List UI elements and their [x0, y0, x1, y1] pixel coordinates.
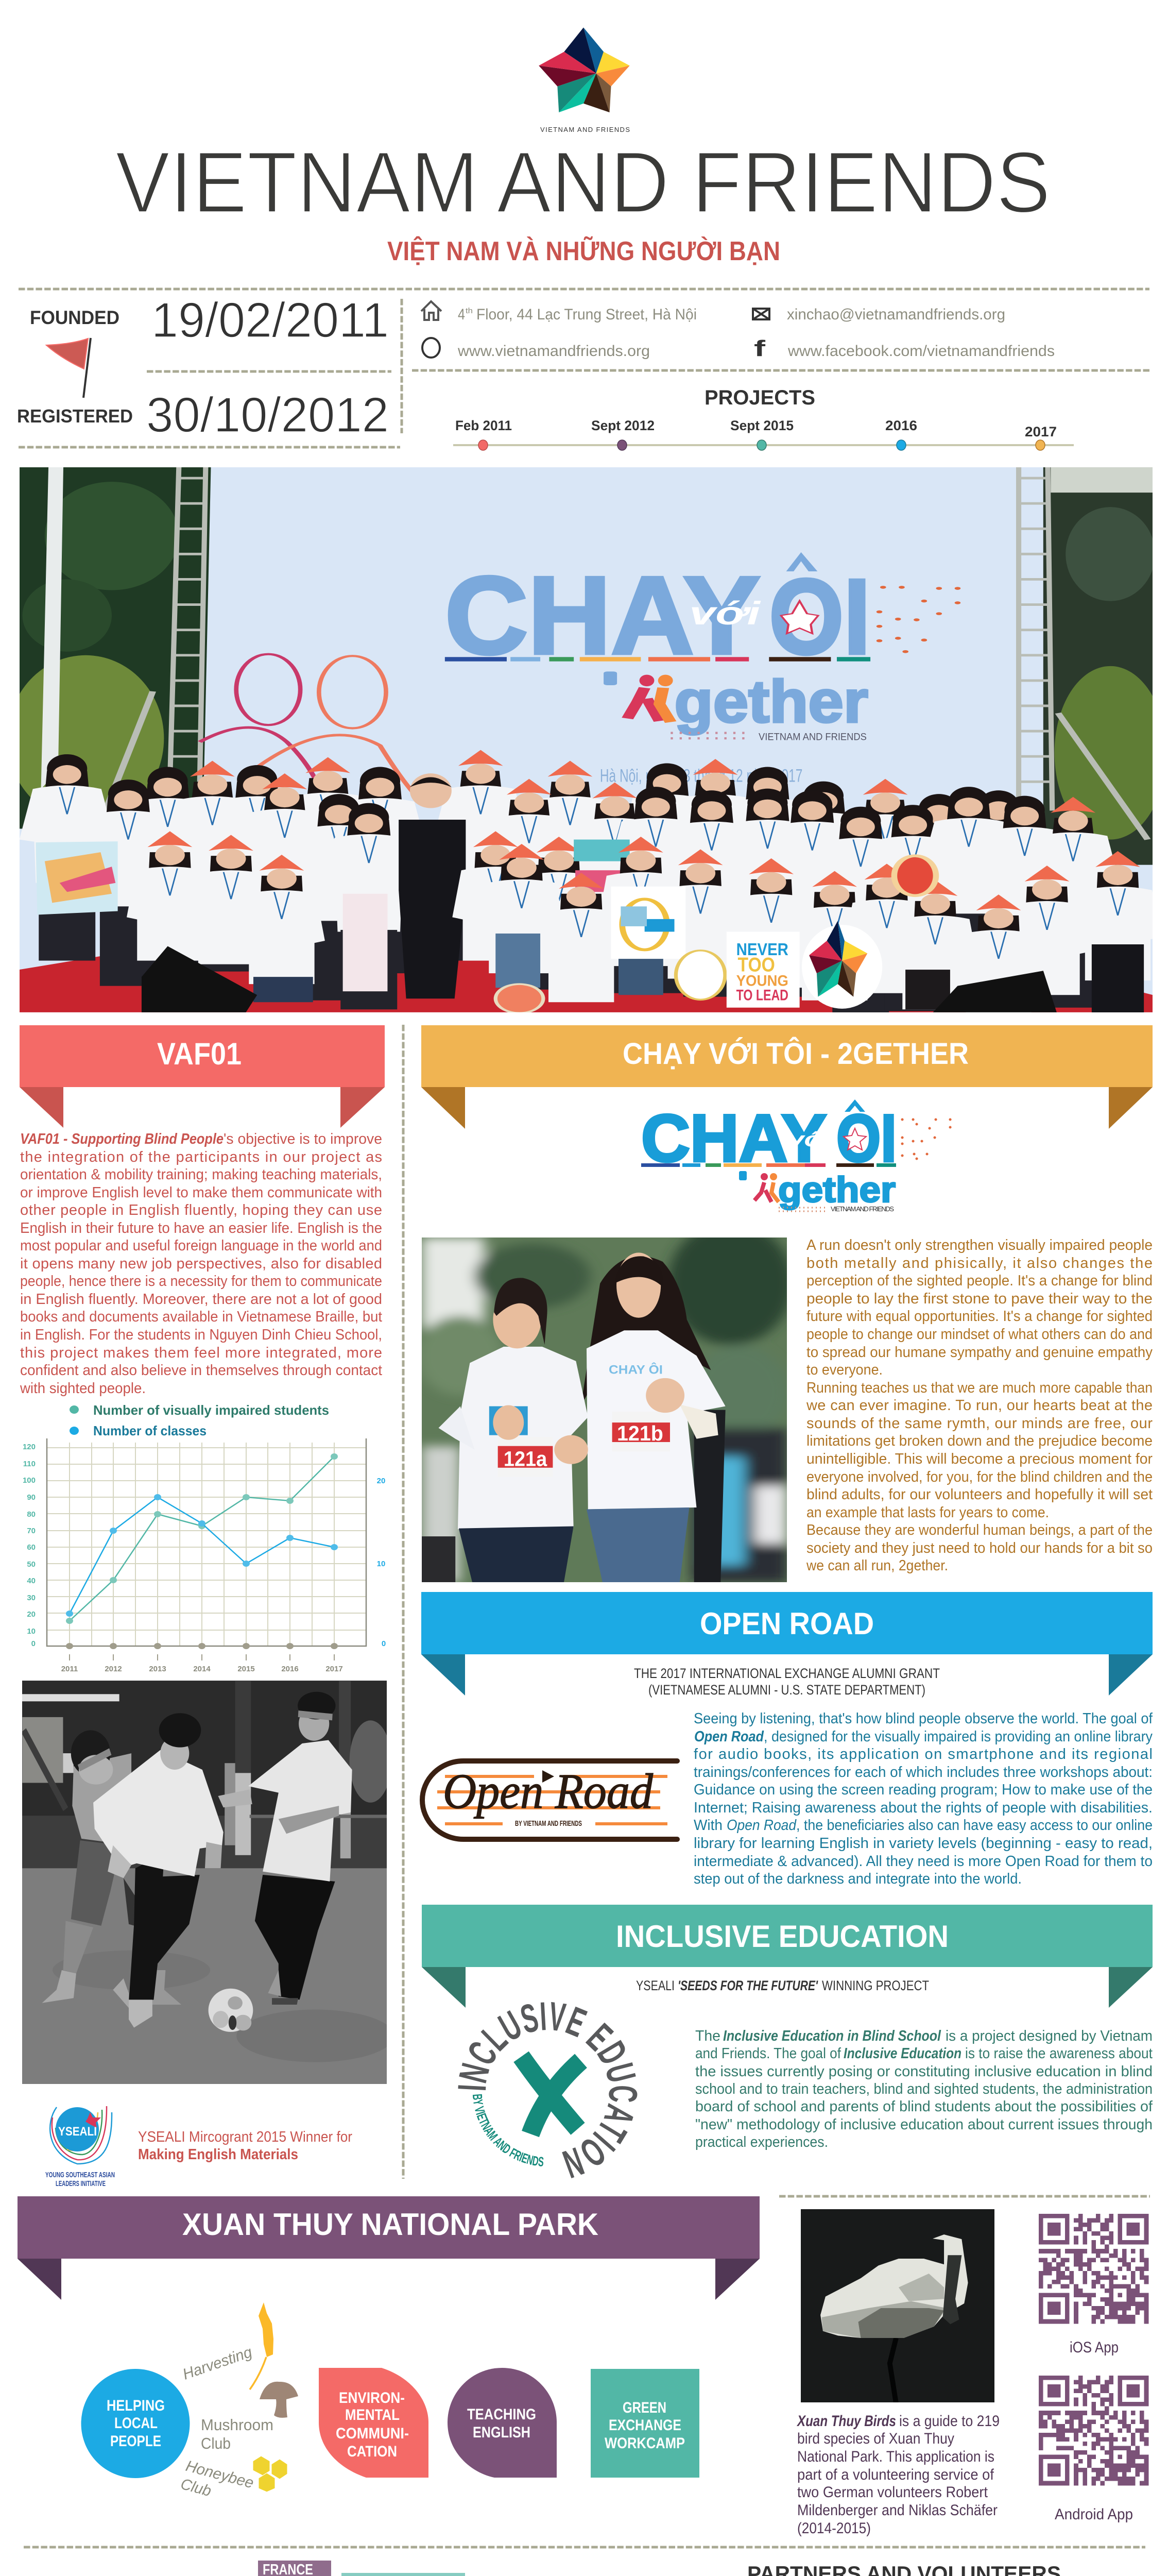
Chay voi toi description text: limitations get broken down and the prejudice become	[806, 1433, 1153, 1449]
heading ribbon: Inclusive Education: INCLUSIVE EDUCATION	[616, 1919, 949, 1954]
logo: Open Road: BY VIETNAM AND FRIENDS	[515, 1819, 582, 1828]
VAF01 description text: other people in English fluently, hoping they can use	[20, 1202, 382, 1218]
heading ribbon: Chay voi toi	[421, 1025, 1153, 1129]
chart legend	[70, 1402, 329, 1438]
Inclusive Education description text: the issues currently posing or constituting inclusive education in blind	[695, 2063, 1153, 2080]
founded block: FOUNDED	[30, 307, 119, 328]
Open Road description text: Internet; Raising awareness about the rights of people with disabilities.	[694, 1800, 1153, 1816]
projects timeline: 2016	[885, 418, 917, 433]
Inclusive Education subtitle: 'SEEDS FOR THE FUTURE'	[678, 1978, 818, 1993]
logo: Inclusive Education: BY VIETNAM AND FRIENDS	[473, 2094, 544, 2166]
Chay voi toi description text: sounds of the same rymth, our minds are free, our	[806, 1415, 1153, 1432]
Open Road description text	[694, 1710, 1153, 1887]
panel: partners map	[17, 2561, 627, 2576]
circle: helping local people: PEOPLE	[110, 2433, 161, 2450]
email: xinchao@vietnamandfriends.org	[787, 306, 1005, 323]
VAF01 description text: this project makes them feel more integrated, more	[20, 1345, 382, 1361]
line chart: students and classes 2011-2017: 2013	[149, 1665, 166, 1673]
hero photo: group on stage in front of banner	[7, 467, 1166, 1024]
panel: Xuan Thuy Birds app	[796, 2209, 1148, 2537]
bird app description: two German volunteers Robert	[797, 2484, 988, 2501]
Inclusive Education description text: The	[695, 2028, 720, 2044]
Chay voi toi description text	[806, 1237, 1153, 1574]
Open Road description text: Open Road	[694, 1728, 764, 1745]
Chay voi toi description text: unintelligible. This will become a precious moment for	[806, 1451, 1153, 1467]
photo: blindfolded students playing football	[22, 1681, 394, 2084]
Chay voi toi description text: people to lay the first stone to pave their way to the	[806, 1291, 1153, 1307]
bird app description: is a guide to 219	[899, 2413, 1000, 2430]
projects timeline	[453, 418, 1074, 450]
bird app description: (2014-2015)	[797, 2520, 871, 2537]
logo: Open Road	[422, 1761, 677, 1839]
Chay voi toi description text: A run doesn't only strengthen visually impaired people	[806, 1237, 1153, 1253]
logo: Chay voi toi 2gether: OI	[836, 1100, 897, 1176]
VAF01 description text: English in their future to have an easier life. English is the	[20, 1220, 382, 1236]
chart legend: Number of classes	[93, 1423, 207, 1438]
Inclusive Education description text: and Friends. The goal of	[695, 2045, 841, 2062]
label: Android app: Android App	[1055, 2506, 1133, 2523]
Inclusive Education description text: Inclusive Education in Blind School	[723, 2028, 941, 2044]
QR code: Android app	[1039, 2378, 1148, 2483]
line chart: students and classes 2011-2017: 10	[27, 1627, 36, 1636]
logo: Chay voi toi 2gether: gether	[778, 1170, 896, 1210]
contact block	[421, 301, 1055, 361]
line chart: students and classes 2011-2017: 20	[27, 1610, 36, 1619]
Inclusive Education subtitle	[636, 1978, 929, 1993]
VAF01 description text	[20, 1131, 382, 1397]
logo: colourful star	[539, 27, 630, 133]
projects heading: PROJECTS	[705, 386, 815, 409]
icon: honeycomb	[253, 2456, 287, 2492]
Inclusive Education description text	[695, 2028, 1153, 2150]
shape: green exchange workcamp: EXCHANGE	[609, 2417, 681, 2434]
logo: YSEALI: YOUNG SOUTHEAST ASIAN	[45, 2171, 115, 2179]
hero photo: group on stage in front of banner: VIETNAM AND FRIENDS	[759, 731, 867, 742]
VAF01 description text: or improve English level to make them communicate with	[20, 1184, 382, 1201]
VAF01 description text: it opens many new job perspectives, also for disabled	[20, 1256, 382, 1272]
facebook url: www.facebook.com/vietnamandfriends	[787, 343, 1055, 360]
Chay voi toi description text: we can all run, 2gether.	[806, 1557, 948, 1574]
line chart: students and classes 2011-2017: 2016	[281, 1665, 299, 1673]
heading ribbon: Open Road: OPEN ROAD	[700, 1606, 874, 1641]
label: mushroom club: Mushroom	[201, 2416, 273, 2434]
VAF01 description text: confident and also believe in themselves through contact	[20, 1362, 382, 1379]
Chay voi toi description text: society and they just need to hold our hands for a bit so	[806, 1540, 1153, 1556]
line chart: students and classes 2011-2017: 90	[27, 1493, 36, 1502]
VAF01 description text: in English fluently. Moreover, there are not a lot of good	[20, 1291, 382, 1308]
VAF01 description text: people, hence there is a necessity for them to communicate	[20, 1273, 382, 1290]
registered block: 30/10/2012	[146, 387, 389, 443]
shape: teaching english: ENGLISH	[473, 2424, 530, 2441]
hero photo: group on stage in front of banner: TOO	[738, 954, 775, 976]
logo: Chay voi toi 2gether: VIETNAM AND FRIENDS	[831, 1205, 894, 1213]
shape: green exchange workcamp: GREEN	[623, 2399, 666, 2416]
title: VIETNAM AND FRIENDS	[115, 133, 1051, 231]
Open Road description text: With	[694, 1817, 723, 1834]
registered block: REGISTERED	[17, 405, 133, 427]
hero photo: group on stage in front of banner: với	[689, 595, 761, 632]
line chart: students and classes 2011-2017: 2012	[105, 1665, 122, 1673]
Inclusive Education description text: Inclusive Education	[844, 2045, 961, 2062]
registered block	[17, 387, 389, 443]
Open Road grant subtitle: THE 2017 INTERNATIONAL EXCHANGE ALUMNI GRANT	[634, 1666, 940, 1681]
heading ribbon: Xuan Thuy National Park	[18, 2196, 760, 2300]
VAF01 description text: with sighted people.	[20, 1380, 146, 1397]
line chart: students and classes 2011-2017: 100	[23, 1476, 36, 1485]
heading ribbon: Chay voi toi: CHẠY VỚI TÔI - 2GETHER	[623, 1037, 969, 1071]
line chart: students and classes 2011-2017: 70	[27, 1527, 36, 1535]
subtitle: VIỆT NAM VÀ NHỮNG NGƯỜI BẠN	[387, 236, 780, 266]
panel: VAF01	[20, 1025, 394, 2188]
Chay voi toi description text: to everyone.	[806, 1362, 883, 1378]
projects timeline: 2017	[1025, 424, 1057, 439]
photo: two runners: CHAY ÔI	[609, 1362, 663, 1377]
Chay voi toi description text: everyone involved, for you, for the blind children and the	[806, 1469, 1153, 1485]
Inclusive Education description text: is to raise the awareness about	[965, 2045, 1153, 2062]
line chart: students and classes 2011-2017: 40	[27, 1577, 36, 1585]
Chay voi toi description text: blind adults, for our volunteers and hopefully it will set	[806, 1486, 1153, 1503]
heading ribbon: Open Road	[421, 1592, 1153, 1696]
Open Road description text: trainings/conferences for each of which includes three workshops about:	[694, 1764, 1153, 1781]
Inclusive Education description text: practical experiences.	[695, 2134, 828, 2150]
label: mushroom club	[201, 2416, 273, 2452]
shape: environmental communication: COMMUNI-	[336, 2425, 409, 2442]
VAF01 description text: books and documents available in Vietnamese Braille, but	[20, 1309, 382, 1325]
line chart: students and classes 2011-2017: 2015	[237, 1665, 255, 1673]
VAF01 description text: in English. For the students in Nguyen Dinh Chieu School,	[20, 1327, 382, 1343]
icon: red flag	[46, 338, 91, 398]
hero photo: group on stage in front of banner: OI	[769, 557, 870, 676]
logo: Chay voi toi 2gether: với	[788, 1128, 832, 1151]
logo: Chay voi toi 2gether: CHAY	[641, 1100, 827, 1176]
panel: Xuan Thuy National Park	[18, 2196, 760, 2500]
YSEALI award caption: Making English Materials	[138, 2146, 298, 2163]
Chay voi toi description text: to spread our humane sympathy and genuine empathy	[806, 1344, 1153, 1361]
Chay voi toi description text: perception of the sighted people. It's a change for blind	[806, 1273, 1153, 1289]
projects timeline: Sept 2015	[730, 418, 794, 433]
shape: teaching english: TEACHING	[467, 2406, 536, 2423]
heading ribbon: VAF01: VAF01	[157, 1037, 242, 1071]
Open Road description text: step out of the darkness and integrate into the world.	[694, 1871, 1022, 1887]
circle: helping local people: HELPING	[107, 2397, 165, 2414]
line chart: students and classes 2011-2017: 110	[23, 1460, 36, 1468]
logo: Open Road: Open Road	[443, 1764, 654, 1819]
line chart: students and classes 2011-2017: 30	[27, 1594, 36, 1602]
label: honeybee club: Honeybee	[184, 2458, 255, 2492]
VAF01 description text: VAF01 - Supporting Blind People	[20, 1131, 224, 1147]
logo: YSEALI	[45, 2106, 115, 2188]
photo: two runners: 121b	[617, 1422, 663, 1446]
shape: environmental communication	[319, 2368, 428, 2478]
bird app description	[796, 2413, 1000, 2537]
line chart: students and classes 2011-2017	[23, 1438, 386, 1673]
Open Road grant subtitle: (VIETNAMESE ALUMNI - U.S. STATE DEPARTMENT)	[648, 1682, 925, 1698]
icon: wheat	[250, 2302, 273, 2389]
YSEALI award caption: YSEALI Mircogrant 2015 Winner for	[138, 2129, 352, 2145]
bird app description: bird species of Xuan Thuy	[797, 2430, 954, 2447]
panel: Chay voi toi - 2gether	[417, 1025, 1153, 1582]
Chay voi toi description text: Because they are wonderful human beings, a part of the	[806, 1522, 1153, 1538]
heading ribbon: Inclusive Education	[422, 1905, 1153, 2008]
Inclusive Education subtitle: WINNING PROJECT	[822, 1978, 929, 1993]
Inclusive Education subtitle: YSEALI	[636, 1978, 675, 1993]
QR code: iOS app	[1039, 2216, 1148, 2321]
logo: Chay voi toi 2gether	[641, 1099, 950, 1213]
photo: two runners: 121a	[504, 1448, 547, 1471]
icon: facebook: f	[754, 336, 766, 361]
label: honeybee club: Club	[179, 2476, 213, 2500]
line chart: students and classes 2011-2017: 80	[27, 1510, 36, 1519]
Open Road description text: Guidance on using the screen reading program; How to make use of the	[694, 1782, 1153, 1798]
founded block: 19/02/2011	[151, 293, 389, 348]
Chay voi toi description text: we can ever imagine. To run, our hearts beat at the	[806, 1397, 1153, 1414]
hero photo: group on stage in front of banner: YOUNG	[736, 973, 788, 989]
hero photo: group on stage in front of banner: gether	[675, 668, 868, 735]
VAF01 description text: most popular and useful foreign language in the world and	[20, 1238, 382, 1254]
Open Road description text: library for learning English in variety levels (beginning - easy to read,	[694, 1835, 1153, 1852]
label: harvesting: Harvesting	[181, 2344, 254, 2383]
bird app description: National Park. This application is	[797, 2448, 994, 2465]
Open Road description text: intermediate & advanced). All they need is more Open Road for them to	[694, 1853, 1153, 1870]
image: spoonbill	[801, 2209, 994, 2403]
panel: Open Road	[421, 1592, 1153, 1887]
address: Floor, 44 Lạc Trung Street, Hà Nội	[476, 306, 697, 323]
shape: green exchange workcamp: WORKCAMP	[605, 2435, 685, 2452]
icon: house	[421, 301, 441, 320]
callout: Germany partners	[341, 2573, 465, 2576]
projects timeline: Feb 2011	[455, 418, 512, 433]
logo: Inclusive Education: INCLUSIVE EDUCATION	[458, 2002, 638, 2178]
Chay voi toi description text: both metally and phisically, it also changes the	[806, 1255, 1153, 1272]
Inclusive Education description text: "new" methodology of inclusive education about current issues through	[695, 2116, 1153, 2133]
hero photo: group on stage in front of banner: TO LEAD	[736, 987, 788, 1004]
founded block	[30, 293, 389, 348]
VAF01 description text: the integration of the participants in our project as	[20, 1149, 382, 1165]
circle: helping local people: LOCAL	[114, 2415, 158, 2432]
icon: globe	[422, 338, 440, 358]
line chart: students and classes 2011-2017: 2014	[193, 1665, 211, 1673]
heading ribbon: VAF01	[20, 1025, 385, 1128]
icon: mushroom	[260, 2382, 298, 2418]
line chart: students and classes 2011-2017: 0	[31, 1639, 36, 1648]
hero photo: group on stage in front of banner: CHAY	[445, 554, 760, 677]
website: www.vietnamandfriends.org	[457, 343, 650, 360]
shape: environmental communication: CATION	[347, 2443, 397, 2460]
Open Road grant subtitle	[634, 1666, 940, 1698]
logo: YSEALI: LEADERS INITIATIVE	[56, 2179, 106, 2188]
Chay voi toi description text: an example that lasts for years to come.	[806, 1504, 1049, 1521]
Inclusive Education description text: is a project designed by Vietnam	[946, 2028, 1153, 2044]
bird app description: Xuan Thuy Birds	[796, 2413, 896, 2430]
Open Road description text: Open Road	[727, 1817, 797, 1834]
line chart: students and classes 2011-2017: 60	[27, 1543, 36, 1552]
line chart: students and classes 2011-2017: 50	[27, 1560, 36, 1569]
shape: environmental communication: MENTAL	[345, 2406, 400, 2424]
line chart: students and classes 2011-2017: 120	[23, 1443, 36, 1451]
circle: helping local people	[81, 2369, 190, 2478]
shape: environmental communication: ENVIRON-	[339, 2389, 405, 2406]
logo: colourful star: VIETNAM AND FRIENDS	[540, 126, 630, 133]
line chart: students and classes 2011-2017: 20	[377, 1477, 385, 1485]
Open Road description text: for audio books, its application on smartphone and its regional	[694, 1746, 1153, 1762]
line chart: students and classes 2011-2017: 10	[377, 1560, 385, 1568]
line chart: students and classes 2011-2017: 2017	[325, 1665, 343, 1673]
chart legend: Number of visually impaired students	[93, 1402, 329, 1418]
shape: green exchange workcamp	[591, 2369, 699, 2478]
bird app description: part of a volunteering service of	[797, 2466, 994, 2483]
shape: teaching english	[448, 2368, 557, 2478]
Chay voi toi description text: future with equal opportunities. It's a change for sighted	[806, 1308, 1153, 1325]
label: mushroom club: Club	[201, 2434, 231, 2452]
heading ribbon: Xuan Thuy National Park: XUAN THUY NATIONAL PARK	[182, 2207, 598, 2242]
VAF01 description text: 's objective is to improve	[224, 1131, 382, 1147]
line chart: students and classes 2011-2017: 2011	[61, 1665, 78, 1673]
YSEALI award caption	[138, 2129, 352, 2163]
icon: envelope	[753, 309, 769, 319]
photo: two runners	[417, 1222, 793, 1582]
label: iOS app: iOS App	[1070, 2339, 1119, 2356]
panel: Inclusive Education	[422, 1905, 1153, 2178]
line chart: students and classes 2011-2017: 0	[382, 1639, 386, 1648]
projects timeline: Sept 2012	[591, 418, 655, 433]
logo: YSEALI: YSEALI	[58, 2125, 97, 2139]
address: th	[466, 307, 473, 315]
Inclusive Education description text: board of school and parents of blind students about the possibilities of	[695, 2098, 1153, 2115]
hero photo: group on stage in front of banner: NEVER	[736, 940, 788, 959]
address: 4	[458, 306, 465, 323]
VAF01 description text: orientation & mobility training; making teaching materials,	[20, 1166, 382, 1183]
bird app description: Mildenberger and Niklas Schäfer	[797, 2502, 998, 2519]
